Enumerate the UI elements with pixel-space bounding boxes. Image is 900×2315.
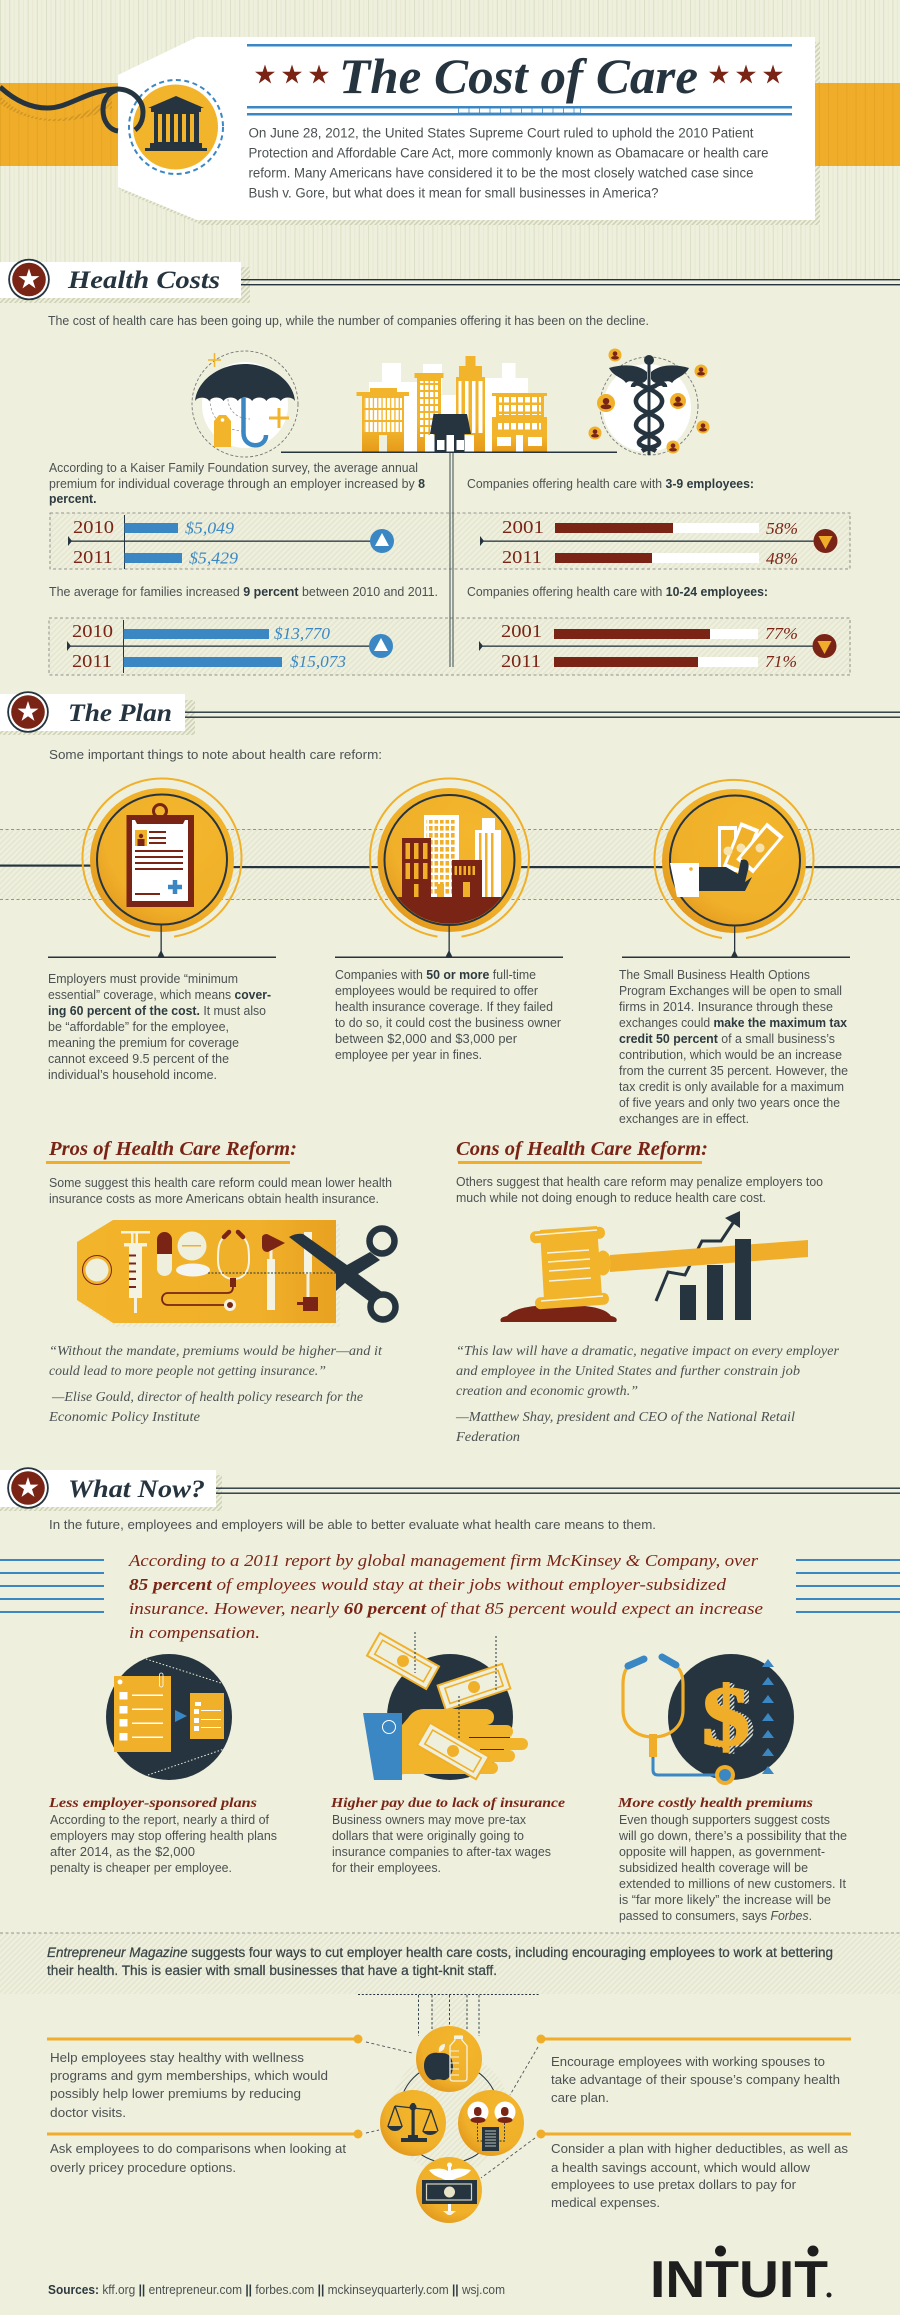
pros quote: Economic Policy Institute [48, 1409, 200, 1424]
plan text 3: of five years and only two years once the [619, 1095, 840, 1110]
tip text 3: take advantage of their spouse’s company health [551, 2072, 840, 2087]
building 2 [414, 373, 444, 452]
column: more costly premiums: will go down, there’s a possibility that the [618, 1828, 847, 1843]
band: Entrepreneur Magazine: Entrepreneur Magazine suggests four ways to cut employer health care costs, including encouraging employees to work at bettering [47, 1945, 833, 1960]
stethoscope [162, 1232, 249, 1311]
pros quote [48, 1343, 383, 1424]
chart: individual premium and 3-9 employees: 48% [766, 549, 798, 568]
column: more costly premiums: is “far more likely” the increase will be [619, 1892, 831, 1907]
callout: McKinsey: in compensation. [129, 1623, 260, 1642]
icon: office buildings [402, 815, 501, 897]
plan text 2: Companies with 50 or more full-time [335, 967, 536, 982]
chart: family premium and 10-24 employees: 2011 [72, 651, 112, 671]
tip text 3: care plan. [551, 2090, 609, 2105]
tip text 1: doctor visits. [50, 2105, 126, 2120]
cons text: Others suggest that health care reform may penalize employers too [456, 1174, 823, 1189]
chart: family premium and 10-24 employees: 2011 [501, 651, 541, 671]
intro text: Bush v. Gore, but what does it mean for small businesses in America? [248, 186, 658, 200]
plan text 1: essential” coverage, which means cover- [48, 987, 271, 1002]
pros quote: —Elise Gould, director of health policy research for the [51, 1389, 363, 1404]
what now intro: In the future, employees and employers will be able to better evaluate what health care means to them. [49, 1517, 656, 1532]
cons text: much while not doing enough to reduce health care cost. [456, 1190, 766, 1205]
text: 3-9 employees: Companies offering health care with 3-9 employees: [467, 476, 754, 491]
plan text 3: exchanges could make the maximum tax [619, 1015, 848, 1030]
callout: McKinsey [0, 1551, 900, 1642]
icon: hand with money [363, 1632, 528, 1780]
icon: bills and hand [670, 822, 784, 897]
intro text: reform. Many Americans have considered it to be the most closely watched case since [248, 166, 754, 180]
logo: Intuit: INTUIT [650, 2251, 828, 2309]
section heading: The Plan [0, 691, 900, 735]
plan text 2: to do so, it could cost the business owner [335, 1015, 562, 1030]
column: higher pay: insurance companies to after-tax wages [332, 1844, 551, 1859]
sources: Sources: kff.org || entrepreneur.com || forbes.com || mckinseyquarterly.com || wsj.com [48, 2282, 505, 2297]
plan text 2: health insurance coverage. If they failed [335, 999, 553, 1014]
right circle: employees and document [458, 2090, 524, 2156]
chart: family premium and 10-24 employees: 2010 [72, 621, 113, 641]
tip text 1 [50, 2050, 328, 2120]
icon: up arrow [370, 529, 394, 553]
callout: McKinsey: According to a 2011 report by global management firm McKinsey & Company, over [128, 1551, 759, 1570]
column: higher pay [330, 1796, 565, 1875]
text: families: The average for families increased 9 percent between 2010 and 2011. [49, 584, 438, 599]
chart: family premium and 10-24 employees: $15,073 [290, 652, 346, 671]
tip text 1: possibly help lower premiums by reducing [50, 2086, 301, 2101]
band: Entrepreneur Magazine [0, 1933, 900, 1994]
plan item 1: clipboard [48, 779, 276, 958]
column: more costly premiums [617, 1796, 847, 1923]
cons quote [455, 1343, 840, 1444]
column: more costly premiums: subsidized health coverage will be [619, 1860, 808, 1875]
plan text 3: firms in 2014. Insurance through these [619, 999, 833, 1014]
plan intro: Some important things to note about health care reform: [49, 747, 382, 762]
pros heading: Pros of Health Care Reform: [48, 1138, 297, 1160]
plan item 2: buildings [335, 779, 563, 958]
chart: family premium and 10-24 employees: 77% [765, 624, 798, 643]
column: higher pay: Higher pay due to lack of insurance [330, 1796, 565, 1811]
column: less employer-sponsored plans: penalty is cheaper per employee. [50, 1860, 232, 1875]
pills [157, 1232, 210, 1276]
tip text 4 [551, 2141, 849, 2210]
intro text: On June 28, 2012, the United States Supreme Court ruled to uphold the 2010 Patient [248, 126, 754, 140]
tip text 4: a health savings account, which would allow [551, 2160, 811, 2175]
icon: gavel and rising chart [500, 1211, 808, 1322]
chart: center divider [450, 453, 454, 667]
cons quote: Federation [455, 1429, 520, 1444]
plan text 2: employees would be required to offer [335, 983, 539, 998]
chart: individual premium and 3-9 employees: 2010 [73, 517, 114, 537]
plan text 1: ing 60 percent of the cost. It must also [48, 1003, 266, 1018]
column: less employer-sponsored plans: Less employer-sponsored plans [48, 1796, 258, 1811]
section heading: Health Costs: Health Costs [67, 267, 220, 294]
tip text 4: Consider a plan with higher deductibles, as well as [551, 2141, 849, 2156]
plan text 3: The Small Business Health Options [619, 967, 810, 982]
plan text 3: contribution, which would be an increase [619, 1047, 842, 1062]
building 4 [492, 393, 547, 452]
plan text 3: Program Exchanges will be open to small [619, 983, 842, 998]
section heading: The Plan: The Plan [68, 700, 172, 727]
rope shadow [0, 96, 112, 121]
callout: McKinsey: insurance. However, nearly 60 percent of that 85 percent would expect an increase [129, 1599, 763, 1618]
blue rules [247, 44, 792, 116]
timeline band [0, 829, 900, 900]
plan text 1: meaning the premium for coverage [48, 1035, 239, 1050]
icon: plans shrinking [106, 1654, 232, 1780]
pros text [49, 1175, 392, 1206]
pros text: insurance costs as more Americans obtain health insurance. [49, 1191, 379, 1206]
tip text 3 [551, 2054, 840, 2105]
plan text 1 [48, 971, 271, 1082]
column: less employer-sponsored plans: According to the report, nearly a third of [50, 1812, 269, 1827]
plan text 1: Employers must provide “minimum [48, 971, 238, 986]
left circle: scales [380, 2090, 446, 2156]
tip text 2 [50, 2141, 346, 2175]
orange ribbon [0, 83, 900, 166]
scissors [289, 1234, 382, 1302]
icon: dollar and stethoscope: $ [702, 1668, 750, 1764]
chart: family premium and 10-24 employees: $13,770 [274, 624, 331, 643]
plan text 3: tax credit is only available for a maximum [619, 1079, 844, 1094]
icon: umbrella [192, 351, 298, 457]
section heading: What Now?: What Now? [68, 1476, 205, 1503]
plan text 3: exchanges are in effect. [619, 1111, 749, 1126]
chart: individual premium and 3-9 employees: 2001 [502, 517, 544, 537]
icon: dollar and stethoscope: $ [706, 1669, 755, 1765]
tip text 1: Help employees stay healthy with wellness [50, 2050, 305, 2065]
cons heading: Cons of Health Care Reform: [456, 1138, 708, 1160]
column: more costly premiums: passed to consumers, says Forbes. [619, 1908, 812, 1923]
tip text 2: Ask employees to do comparisons when looking at [50, 2141, 346, 2156]
intro text [248, 126, 768, 200]
plan text 1: cannot exceed 9.5 percent of the [48, 1051, 229, 1066]
chart: family premium and 10-24 employees: 2001 [501, 621, 542, 641]
column: less employer-sponsored plans [48, 1796, 277, 1875]
tool [297, 1232, 318, 1311]
plan text 2: between $2,000 and $3,000 per [335, 1031, 518, 1046]
callout: McKinsey: 85 percent of employees would stay at their jobs without employer-subsidized [129, 1575, 727, 1594]
section heading: Health Costs [0, 259, 900, 303]
bottom circle: caduceus and cash [416, 2157, 482, 2223]
chart: family premium and 10-24 employees: 71% [765, 652, 797, 671]
icon: medical price tag with scissors [77, 1220, 396, 1327]
icon cluster: four ways [358, 1994, 540, 2223]
icon: down arrow [814, 529, 838, 553]
tip text 4: medical expenses. [551, 2195, 660, 2210]
plan text 1: individual’s household income. [48, 1067, 217, 1082]
syringe [121, 1231, 150, 1313]
header tag panel [0, 37, 900, 225]
column: more costly premiums: More costly health premiums [617, 1796, 814, 1811]
text: individual premium: According to a Kaiser Family Foundation survey, the average annual [49, 460, 418, 475]
title stars [255, 64, 783, 83]
text: individual premium: percent. [49, 491, 96, 506]
tip rule 4 [536, 2130, 851, 2138]
icon: clipboard [126, 804, 194, 907]
column: less employer-sponsored plans: after 2014, as the $2,000 [50, 1844, 195, 1859]
chart: family premium and 10-24 employees [49, 618, 850, 675]
icon: dollar and stethoscope [623, 1654, 794, 1785]
tip text 1: programs and gym memberships, which would [50, 2068, 328, 2083]
icon: courthouse [129, 80, 223, 174]
chart: individual premium and 3-9 employees: 2011 [73, 547, 113, 567]
cons quote: creation and economic growth.” [456, 1383, 638, 1398]
health costs intro: The cost of health care has been going up, while the number of companies offering it has been on the decline. [48, 313, 649, 328]
top circle: apple and bottle [416, 2026, 482, 2092]
cons text [456, 1174, 823, 1205]
pros text: Some suggest this health care reform could mean lower health [49, 1175, 392, 1190]
plan text 2: employee per year in fines. [335, 1047, 482, 1062]
building 3 [456, 356, 485, 452]
intro text: Protection and Affordable Care Act, more commonly known as Obamacare or health care [248, 146, 768, 160]
tip text 4: employees to use pretax dollars to pay for [551, 2177, 797, 2192]
band: Entrepreneur Magazine: their health. This is easier with small businesses that have a tight-knit staff. [47, 1963, 497, 1978]
tip rule 1 [47, 2034, 362, 2044]
plan text 1: be “affordable” for the employee, [48, 1019, 229, 1034]
building 1 [356, 388, 409, 452]
icon: city skyline [281, 356, 617, 453]
column: higher pay: Business owners may move pre-tax [332, 1812, 526, 1827]
text: individual premium: premium for individual coverage through an employer increased by 8 [49, 476, 425, 491]
column: less employer-sponsored plans: employers may stop offering health plans [50, 1828, 277, 1843]
plan text 3: credit 50 percent of a small business’s [619, 1031, 835, 1046]
plan item 3: money in hand [622, 780, 850, 958]
chart: individual premium and 3-9 employees: $5,429 [189, 548, 239, 568]
pros quote: could lead to more people not getting insurance.” [49, 1363, 326, 1378]
chart: individual premium and 3-9 employees: $5,049 [185, 518, 235, 538]
title: The Cost of Care [339, 48, 698, 104]
plan text 2 [335, 967, 562, 1062]
column: higher pay: dollars that were originally going to [332, 1828, 524, 1843]
tip text 2: overly pricey procedure options. [50, 2160, 236, 2175]
column: more costly premiums: opposite will happen, as government- [619, 1844, 825, 1859]
cons quote: and employee in the United States and further constrain job [456, 1363, 800, 1378]
icon: caduceus and employees [588, 348, 710, 455]
section heading: What Now? [0, 1467, 900, 1511]
tip rule 3 [536, 2034, 851, 2044]
text: 10-24 employees: Companies offering health care with 10-24 employees: [467, 584, 768, 599]
icon: up arrow [369, 634, 393, 658]
column: more costly premiums: extended to millions of new customers. It [619, 1876, 846, 1891]
chart: individual premium and 3-9 employees [50, 513, 850, 569]
plan text 3 [619, 967, 848, 1126]
pros quote: “Without the mandate, premiums would be higher—and it [49, 1343, 383, 1358]
tip text 3: Encourage employees with working spouses to [551, 2054, 825, 2069]
column: higher pay: for their employees. [332, 1860, 441, 1875]
chart: individual premium and 3-9 employees: 58% [766, 519, 798, 538]
cons quote: —Matthew Shay, president and CEO of the National Retail [455, 1409, 795, 1424]
plan text 3: from the current 35 percent. However, the [619, 1063, 848, 1078]
icon: rope [0, 87, 143, 131]
tip rule 2 [47, 2130, 362, 2138]
text: individual premium [49, 460, 425, 506]
cons quote: “This law will have a dramatic, negative impact on every employer [456, 1343, 840, 1358]
icon: down arrow [812, 634, 836, 658]
column: more costly premiums: Even though supporters suggest costs [619, 1812, 830, 1827]
house [425, 414, 474, 452]
reflex hammer [262, 1234, 285, 1310]
chart: individual premium and 3-9 employees: 2011 [502, 547, 542, 567]
